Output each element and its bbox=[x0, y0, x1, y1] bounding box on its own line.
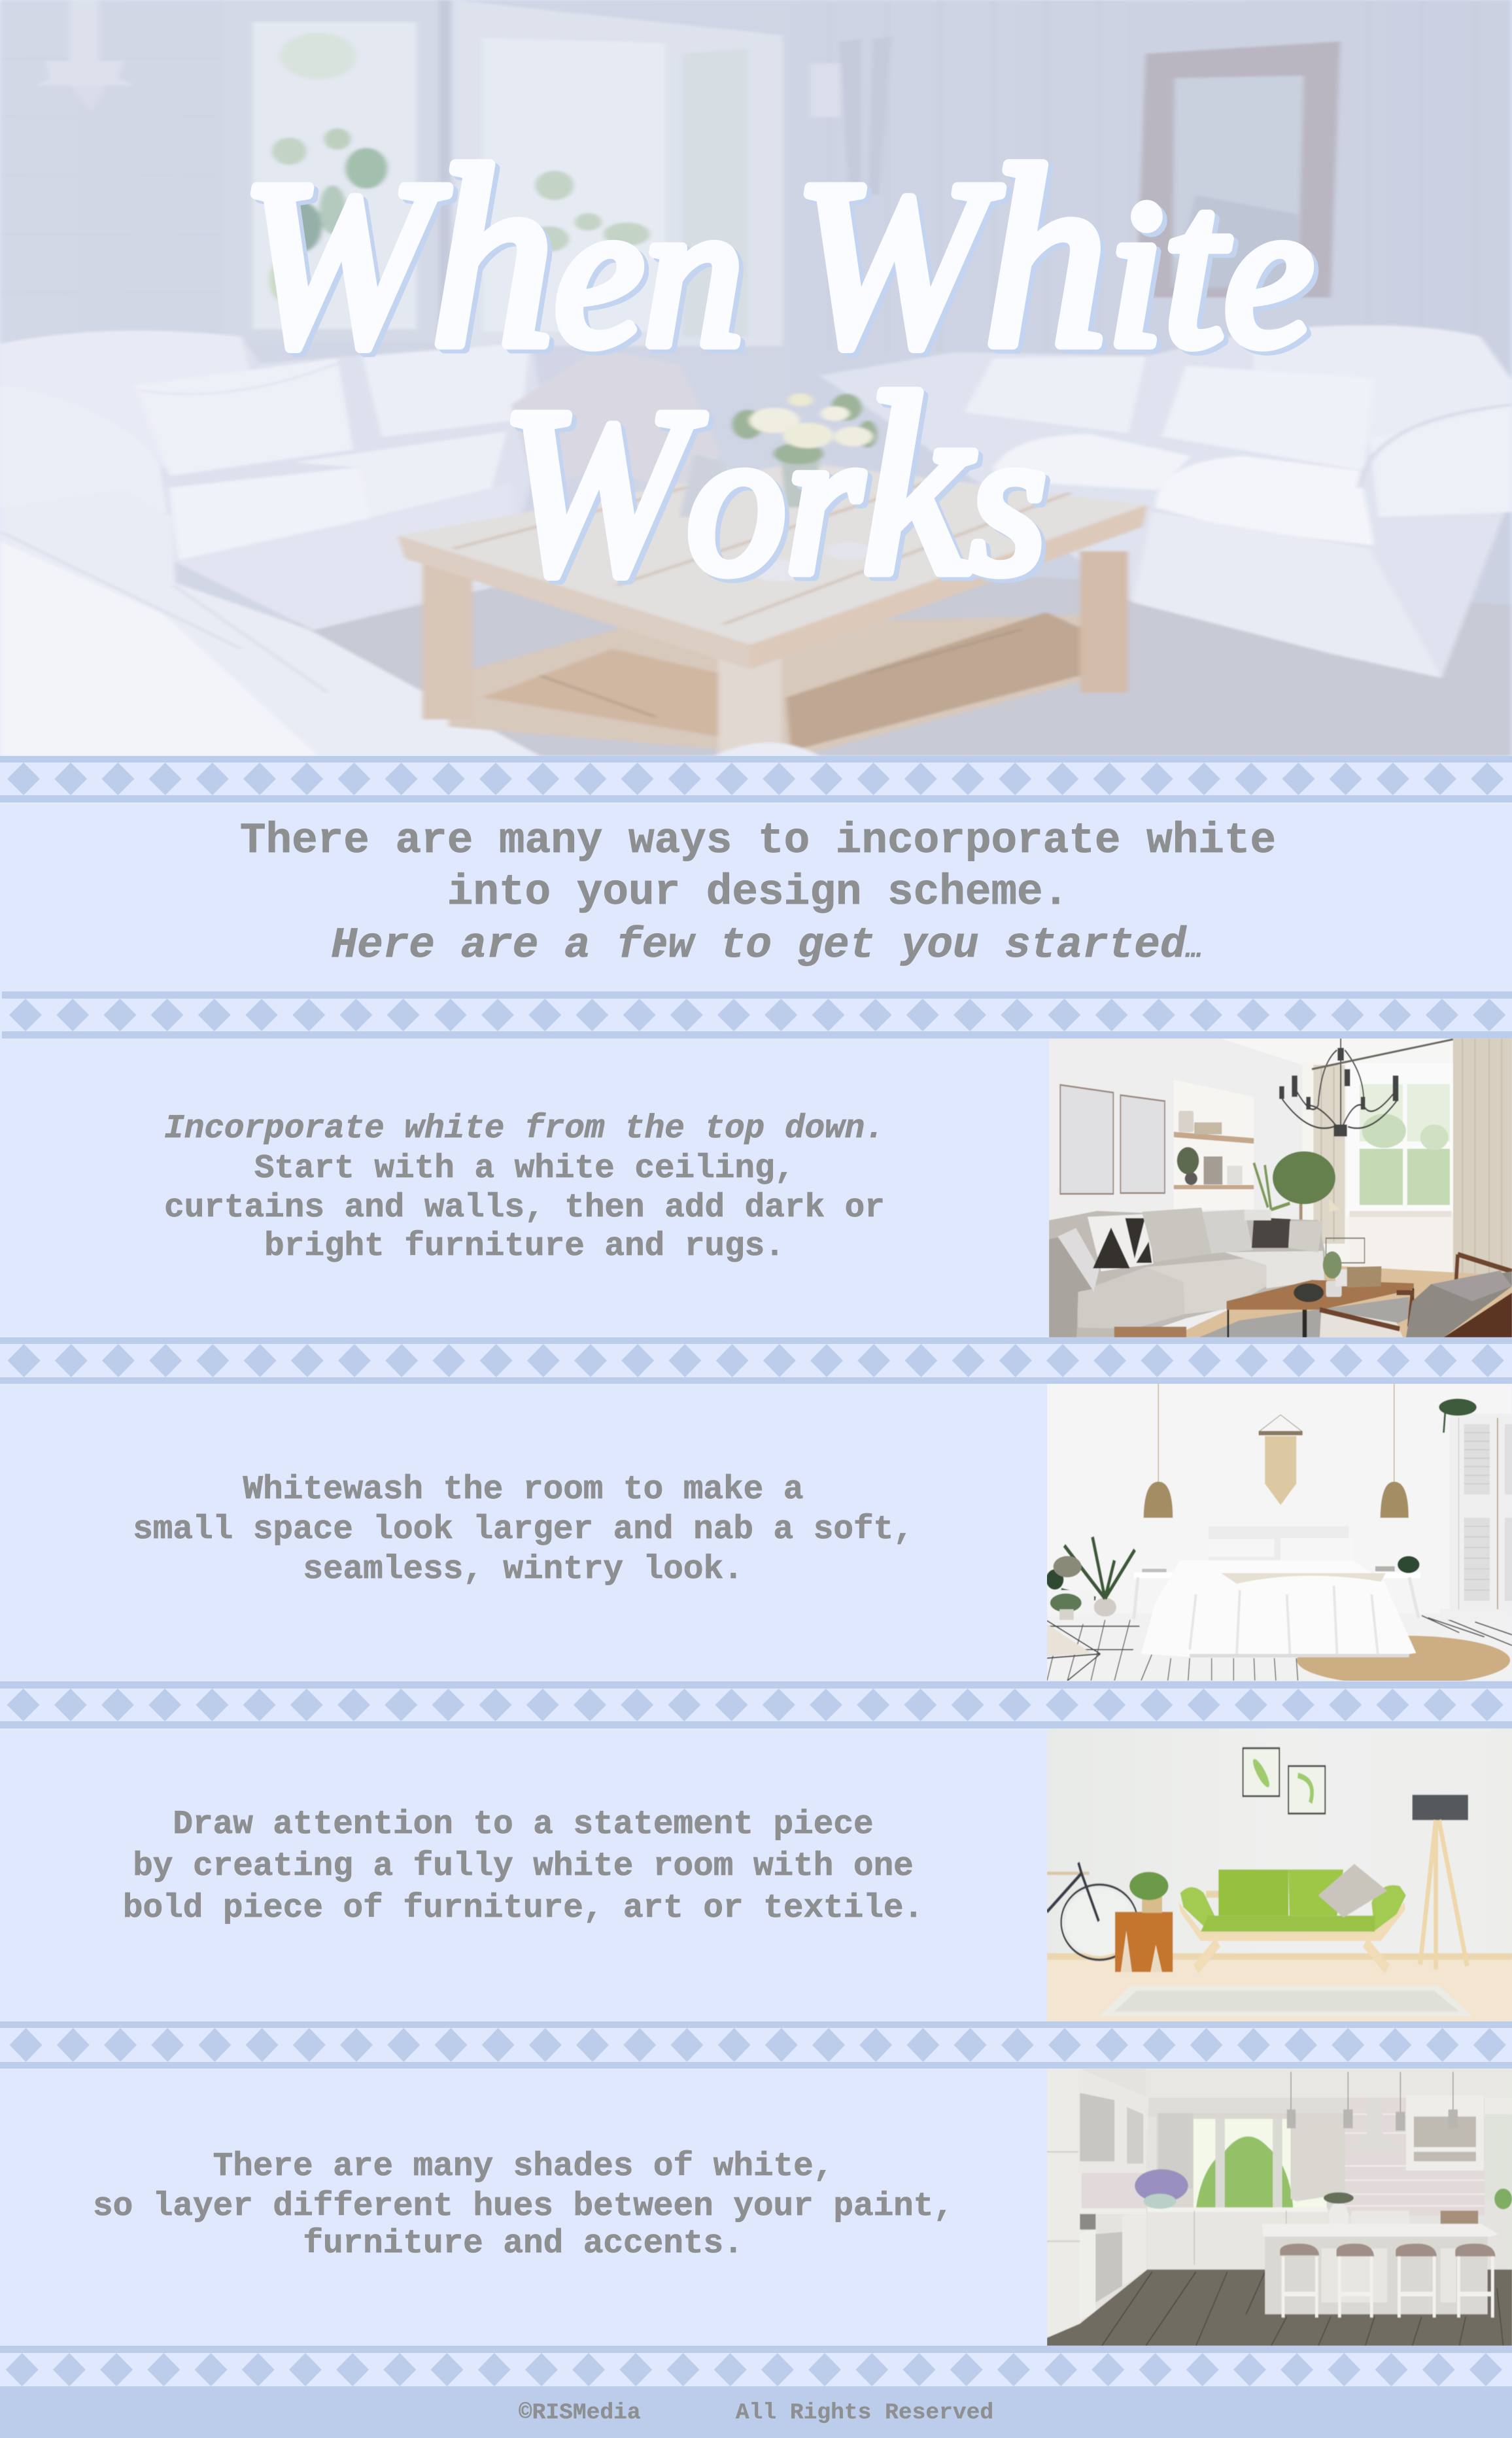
wall sconce and skis bbox=[810, 63, 841, 117]
footer bar bbox=[0, 2386, 1512, 2438]
right sofa bbox=[819, 326, 1512, 678]
tip 1 text: Incorporate white from the top down. bbox=[164, 1110, 885, 1148]
table legs bbox=[422, 546, 472, 719]
chandelier bbox=[1282, 1039, 1398, 1131]
tip 2 text: seamless, wintry look. bbox=[303, 1551, 744, 1588]
floor bbox=[289, 575, 1512, 756]
right cabinet bbox=[1406, 2095, 1484, 2171]
tree bbox=[1299, 1190, 1303, 1224]
coffee table bbox=[1226, 1280, 1414, 1310]
pendant lamps bbox=[1158, 1384, 1394, 1482]
tip 2 text: Whitewash the room to make a bbox=[243, 1471, 803, 1509]
tip 3 text bbox=[123, 1806, 923, 1927]
tip 2 text bbox=[133, 1471, 914, 1588]
photo 4: white kitchen bbox=[1047, 2069, 1512, 2346]
decorative band 6 bbox=[0, 2346, 1512, 2386]
title: Works bbox=[500, 342, 1046, 628]
intro text: into your design scheme. bbox=[447, 868, 1069, 917]
window bbox=[1347, 1063, 1453, 1216]
wardrobe bbox=[1450, 1414, 1512, 1613]
wall hanging bbox=[1259, 1415, 1303, 1432]
sofa bbox=[1049, 1211, 1325, 1337]
niche bbox=[1174, 1080, 1254, 1210]
stool and plant bbox=[1115, 1912, 1173, 1972]
curtains bbox=[1313, 1065, 1345, 1244]
front left sofa bbox=[0, 488, 540, 756]
tip 4 text: furniture and accents. bbox=[303, 2225, 744, 2263]
window left bbox=[222, 0, 449, 341]
hood bbox=[1347, 2098, 1405, 2152]
tip 3 text: Draw attention to a statement piece bbox=[173, 1806, 874, 1844]
sofa cushions bbox=[1206, 1891, 1221, 1898]
intro text: Here are a few to get you started… bbox=[331, 921, 1202, 970]
backsplash bbox=[1343, 2098, 1485, 2216]
wall lamp bbox=[37, 0, 133, 86]
rug bbox=[1099, 1985, 1473, 2016]
hero photo: white living room with blue tint bbox=[0, 0, 1512, 756]
floor bbox=[1047, 2269, 1512, 2346]
flowers bbox=[1135, 2169, 1188, 2202]
sofa frame bbox=[1178, 1902, 1405, 1941]
decorative band 1 bbox=[0, 756, 1512, 802]
floor bbox=[1171, 1265, 1512, 1337]
left sofa bbox=[0, 331, 545, 630]
sink cabinets bbox=[1147, 2210, 1328, 2269]
photo 2: white bedroom bbox=[1047, 1384, 1512, 1681]
tip 3 text: by creating a fully white room with one bbox=[133, 1848, 914, 1885]
armchair bbox=[1320, 1310, 1403, 1337]
plants bbox=[1093, 1598, 1116, 1617]
lamp bbox=[1413, 1794, 1468, 1820]
tip 3 text: bold piece of furniture, art or textile. bbox=[123, 1890, 923, 1927]
door bbox=[453, 0, 783, 347]
photo 1: modern living room bbox=[1049, 1039, 1512, 1337]
counter items bbox=[1441, 2210, 1478, 2232]
footer text: ©RISMedia All Rights Reserved bbox=[519, 2400, 993, 2426]
left cabinets bbox=[1047, 2069, 1082, 2337]
tip 4 text: so layer different hues between your paint, bbox=[93, 2188, 954, 2225]
title: When White bbox=[241, 114, 1313, 400]
stove bbox=[1351, 2210, 1409, 2224]
tip 1 text: bright furniture and rugs. bbox=[264, 1228, 785, 1265]
tip 1 text: Start with a white ceiling, bbox=[254, 1150, 795, 1188]
table lower shelf bbox=[449, 615, 1104, 756]
title bbox=[241, 114, 1313, 628]
window and curtains bbox=[1146, 2098, 1347, 2116]
bed bbox=[1209, 1526, 1349, 1560]
pendants bbox=[1291, 2072, 1453, 2114]
wall frames bbox=[1060, 1085, 1113, 1194]
decorative band 2 bbox=[2, 991, 1512, 1039]
photo 3: green sofa room bbox=[1047, 1728, 1512, 2021]
decorative band 3 bbox=[0, 1337, 1512, 1384]
rug bbox=[1297, 1636, 1510, 1685]
bicycle bbox=[1061, 1885, 1138, 1960]
art frames bbox=[1243, 1748, 1279, 1796]
chair bbox=[1047, 1621, 1101, 1681]
decorative band 5 bbox=[0, 2021, 1512, 2069]
table top bbox=[397, 462, 1148, 645]
tip 4 text: There are many shades of white, bbox=[213, 2148, 833, 2186]
decorative band 4 bbox=[0, 1681, 1512, 1728]
rug bbox=[1199, 1297, 1409, 1337]
side table bbox=[1326, 1238, 1365, 1263]
bouquet bbox=[732, 394, 878, 507]
tip 1 text bbox=[164, 1110, 885, 1265]
nightstands bbox=[1134, 1572, 1178, 1578]
front sofa bumps bbox=[424, 742, 819, 756]
throw bbox=[511, 349, 721, 492]
table ornaments bbox=[752, 560, 810, 581]
intro text: There are many ways to incorporate white bbox=[240, 816, 1276, 865]
tip 4 text bbox=[93, 2148, 954, 2263]
tip 1 text: curtains and walls, then add dark or bbox=[164, 1190, 885, 1227]
mirror bbox=[1136, 41, 1341, 298]
intro text bbox=[240, 816, 1276, 970]
tip 2 text: small space look larger and nab a soft, bbox=[133, 1511, 914, 1549]
stools bbox=[1280, 2244, 1496, 2256]
island bbox=[1265, 2236, 1488, 2314]
